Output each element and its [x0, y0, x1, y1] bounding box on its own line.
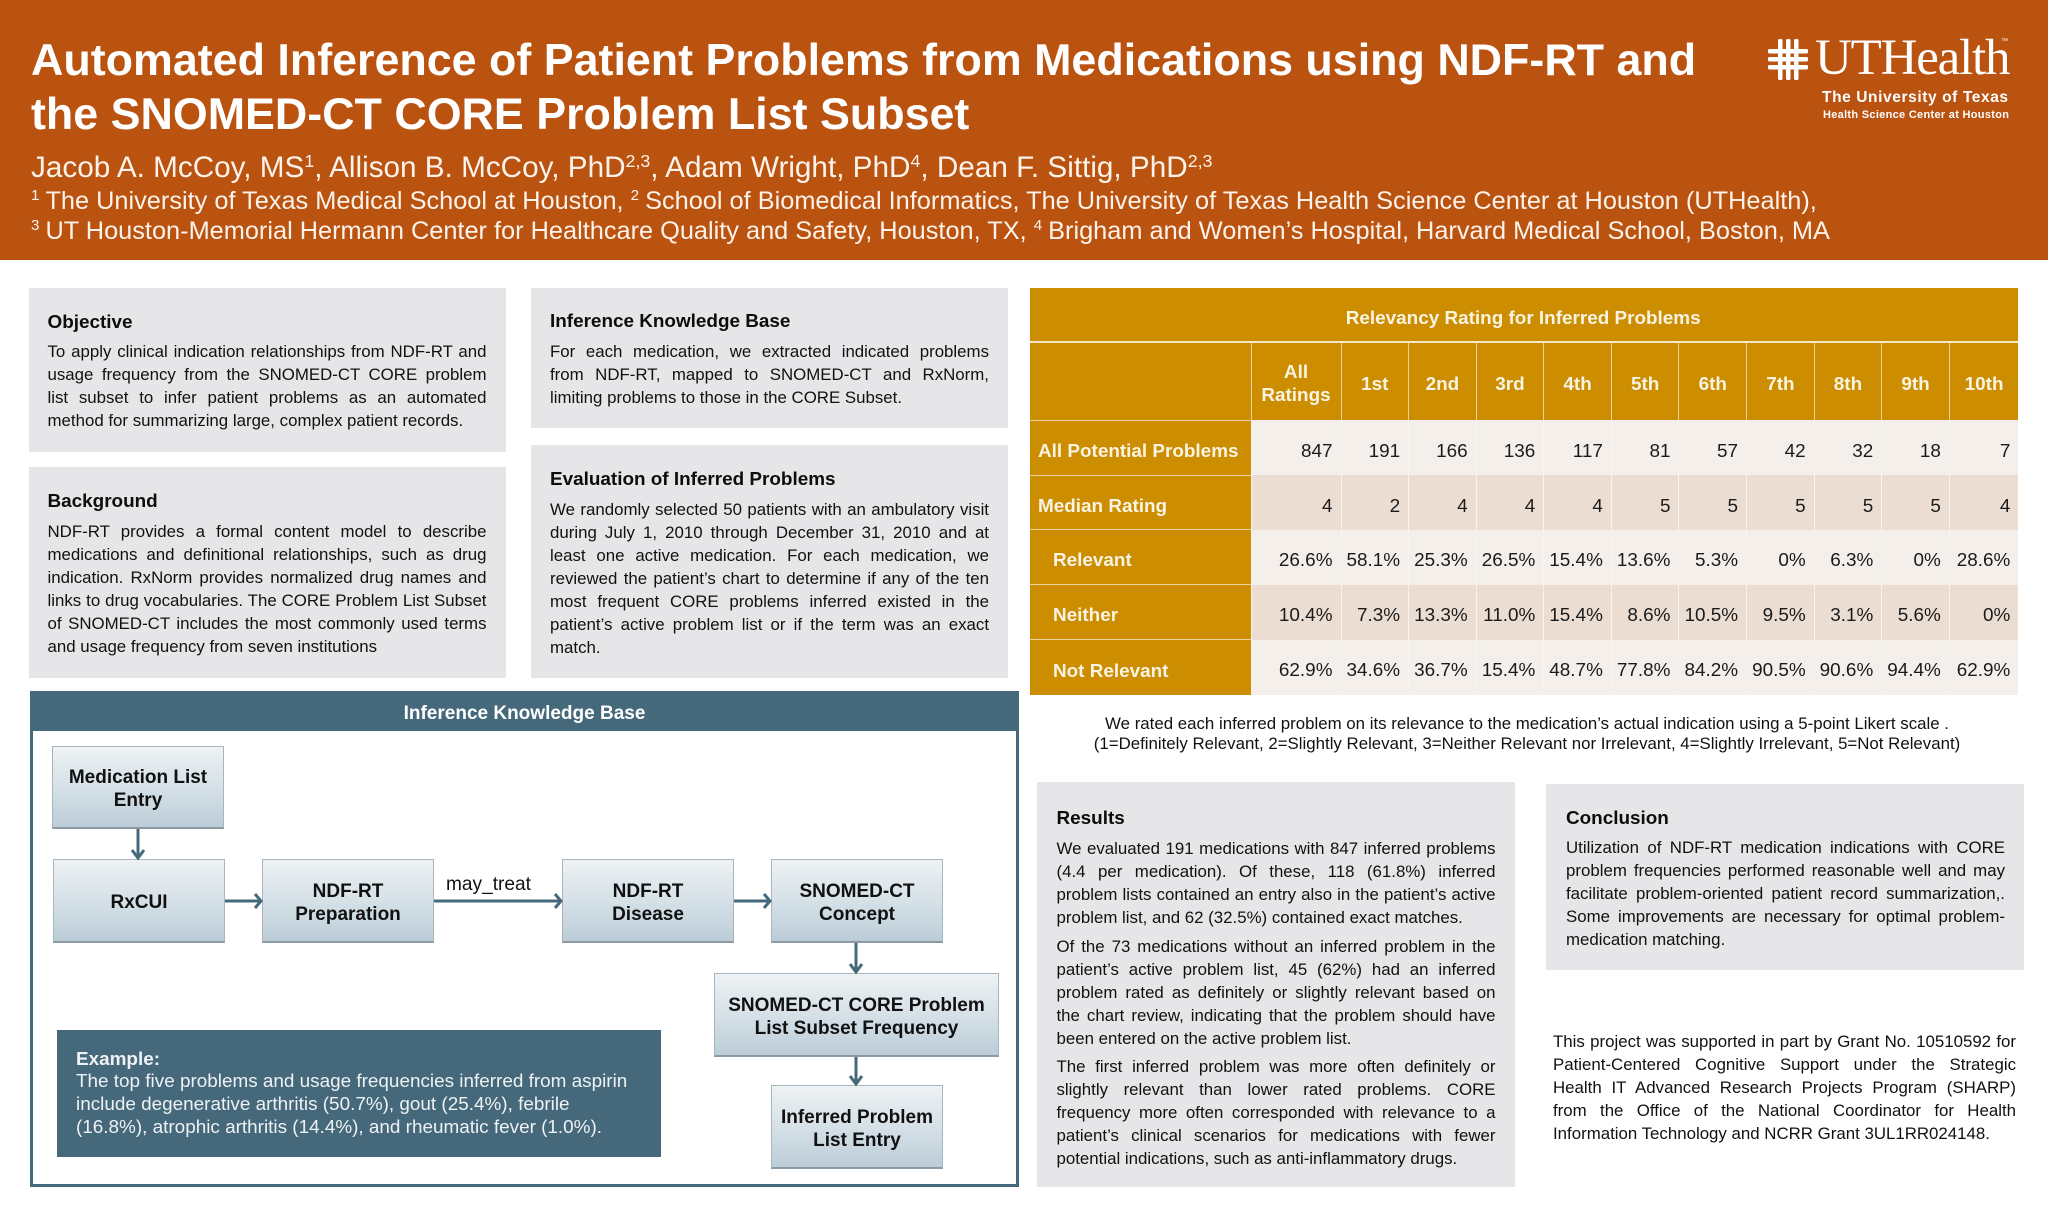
box: SNOMED-CT CORE frequency: SNOMED-CT CORE Problem	[728, 994, 985, 1016]
text: grant acknowledgement: Information Technology and NCRR Grant 3UL1RR024148.	[1553, 1124, 1990, 1142]
table: relevancy rating for inferred problems: 13.6%	[1617, 550, 1670, 571]
table: relevancy rating for inferred problems: 7	[2000, 441, 2010, 462]
text: conclusion: Some improvements are necessary for optimal problem-	[1566, 907, 2005, 926]
table: relevancy rating for inferred problems: 15.4%	[1549, 605, 1603, 626]
table: relevancy rating for inferred problems: 166	[1436, 441, 1468, 462]
table: relevancy rating for inferred problems: 4	[1322, 496, 1332, 517]
table: relevancy rating for inferred problems: Relevancy Rating for Inferred Problems	[1346, 308, 1701, 328]
text: evaluation: reviewed the patient’s chart to determine if any of the ten	[550, 568, 989, 588]
affiliations: 1The University of Texas Medical School at Houston, 2School of Biomedical Informatics, The University of Texas Health Science Center at Houston (UTHealth),	[31, 186, 1817, 214]
table: relevancy rating for inferred problems: 9th	[1901, 374, 1930, 394]
table: relevancy rating for inferred problems: 5.6%	[1898, 605, 1941, 626]
table: relevancy rating for inferred problems: 5	[1728, 496, 1738, 517]
text: inference knowledge base: limiting problems to those in the CORE Subset.	[550, 388, 902, 406]
table: relevancy rating for inferred problems: 26.5%	[1482, 550, 1535, 571]
table: relevancy rating for inferred problems: 0%	[1983, 605, 2010, 626]
example text: (16.8%), atrophic arthritis (14.4%), and rheumatic fever (1.0%).	[76, 1117, 602, 1138]
table: relevancy rating for inferred problems: 4th	[1563, 374, 1592, 394]
box: NDF-RT disease: NDF-RT	[613, 880, 683, 902]
text: background: medications and definitional relationships, such as drug	[48, 545, 486, 564]
arrow: frequency to inferred entry	[850, 1057, 862, 1084]
table: relevancy rating for inferred problems: 15.4%	[1482, 660, 1535, 681]
box: SNOMED-CT CORE frequency	[714, 973, 999, 1057]
text: conclusion: Utilization of NDF-RT medication indications with CORE	[1566, 838, 2005, 857]
table: relevancy rating for inferred problems: All Potential Problems	[1038, 441, 1238, 462]
table: relevancy rating for inferred problems: 0%	[1914, 550, 1941, 571]
text: results: patient’s clinical scenarios for medications with fewer	[1056, 1126, 1496, 1145]
arrows	[130, 829, 864, 1086]
table: relevancy rating for inferred problems: 84.2%	[1684, 660, 1738, 681]
table: relevancy rating for inferred problems: 13.3%	[1414, 605, 1468, 626]
table: relevancy rating for inferred problems: 15.4%	[1549, 550, 1603, 571]
table: relevancy rating for inferred problems: 26.6%	[1279, 550, 1332, 571]
text: results: We evaluated 191 medications with 847 inferred problems	[1056, 839, 1496, 858]
text: results: problem rated as definitely or slightly relevant based on	[1056, 983, 1496, 1002]
text: results: slightly relevant than lower rated problems. CORE	[1056, 1080, 1496, 1099]
text: background: NDF-RT provides a formal content model to describe	[48, 522, 486, 541]
text: inference knowledge base: For each medication, we extracted indicated problems	[550, 342, 989, 360]
table: relevancy rating for inferred problems: 90.6%	[1820, 660, 1873, 681]
arrow: disease to concept	[734, 894, 770, 908]
arrow: preparation to disease	[434, 894, 561, 908]
diagram header	[33, 694, 1016, 731]
table: relevancy rating for inferred problems: 8th	[1834, 374, 1862, 394]
table: relevancy rating for inferred problems: 0%	[1778, 550, 1806, 571]
table: relevancy rating for inferred problems: 10th	[1965, 374, 2004, 394]
box: NDF-RT preparation: Preparation	[295, 904, 401, 924]
table: relevancy rating for inferred problems: Neither	[1053, 605, 1118, 626]
panel: evaluation of inferred problems	[531, 445, 1008, 678]
panel: objective	[29, 288, 506, 452]
text: grant acknowledgement: Patient-Centered Cognitive Support under the Strategic	[1553, 1054, 2016, 1074]
box: inferred problem list entry: Inferred Problem	[781, 1106, 933, 1128]
box: inferred problem list entry: List Entry	[813, 1130, 901, 1150]
authors: Jacob A. McCoy, MS1, Allison B. McCoy, PhD2,3, Adam Wright, PhD4, Dean F. Sittig, PhD2,3	[31, 150, 1212, 184]
table: relevancy rating for inferred problems: 11.0%	[1483, 605, 1535, 626]
text: background: and usage frequency from seven institutions	[48, 637, 377, 656]
table: relevancy rating for inferred problems: 8.6%	[1627, 605, 1670, 626]
table: relevancy rating for inferred problems: 34.6%	[1347, 660, 1400, 681]
table: relevancy rating for inferred problems: 2	[1390, 496, 1400, 517]
arrow: concept to frequency	[850, 943, 862, 972]
table: relevancy rating for inferred problems: 18	[1920, 441, 1941, 462]
box: medication list entry	[52, 746, 224, 829]
example text: Example:	[76, 1048, 160, 1070]
table: relevancy rating for inferred problems: Ratings	[1261, 385, 1331, 406]
table: relevancy rating for inferred problems: 4	[1525, 496, 1535, 517]
box: SNOMED-CT concept: Concept	[819, 904, 895, 924]
logo wordmark: UTHealth	[1815, 30, 2009, 86]
text: inference knowledge base	[550, 342, 989, 406]
table: relevancy rating for inferred problems: 62.9%	[1279, 660, 1332, 681]
header banner	[0, 0, 2048, 260]
text: evaluation: most frequent CORE problems inferred existed in the	[550, 592, 989, 610]
label: may_treat: may_treat	[446, 874, 531, 895]
icon: woven logo mark	[1768, 39, 1808, 80]
heading: evaluation: Evaluation of Inferred Problems	[550, 468, 836, 490]
box: medication list entry: Medication List	[69, 767, 207, 788]
text: results: the chart review, indicating that the problem should have	[1056, 1006, 1496, 1025]
text: background: links to drug vocabularies. The CORE Problem List Subset	[48, 591, 486, 610]
example text: include degenerative arthritis (50.7%), gout (25.4%), febrile	[76, 1094, 570, 1115]
table: relevancy rating for inferred problems: 7th	[1766, 374, 1795, 394]
text: evaluation	[550, 500, 989, 656]
arrow: medication to RxCUI	[132, 829, 144, 858]
table: relevancy rating for inferred problems: 48.7%	[1549, 660, 1603, 681]
table: relevancy rating for inferred problems: 3.1%	[1830, 605, 1873, 626]
table: relevancy rating for inferred problems: 9.5%	[1763, 605, 1806, 626]
logo university line: The University of Texas	[1822, 89, 2009, 106]
table: relevancy rating for inferred problems: 10.4%	[1279, 605, 1332, 626]
table: relevancy rating for inferred problems: 6.3%	[1830, 550, 1873, 571]
table: relevancy rating for inferred problems: 62.9%	[1957, 660, 2010, 681]
table: relevancy rating for inferred problems: 4	[1592, 496, 1603, 517]
table: relevancy rating for inferred problems: 10.5%	[1684, 605, 1738, 626]
text: evaluation: least one active medication. For each medication, we	[550, 546, 989, 564]
table: relevancy rating for inferred problems: 6th	[1699, 374, 1727, 394]
table: relevancy rating for inferred problems: 847	[1301, 441, 1332, 462]
table caption: Likert scale	[1094, 714, 1960, 753]
text: conclusion: facilitate problem-oriented patient record summarization,.	[1566, 884, 2005, 903]
text: objective: method for summarizing large, complex patient records.	[48, 411, 463, 430]
box: SNOMED-CT concept	[771, 859, 943, 943]
text: results: patient’s active problem list, 45 (62%) had an inferred	[1056, 960, 1496, 979]
example text	[76, 1048, 627, 1138]
text: objective: list subset to infer patient problems as an automated	[48, 388, 486, 407]
text: conclusion: problem frequencies performed reasonable well and may	[1566, 861, 2005, 880]
table: relevancy rating for inferred problems: 4	[1457, 496, 1468, 517]
text: evaluation: patient’s active problem list or if the term was an exact	[550, 614, 989, 634]
table: relevancy rating for inferred problems: 42	[1785, 441, 1806, 462]
table: relevancy rating for inferred problems: 5	[1660, 496, 1670, 517]
box: RxCUI: RxCUI	[110, 892, 168, 913]
logo: UTHealth	[1768, 30, 2010, 120]
title: Automated Inference of Patient Problems from Medications using NDF-RT and	[31, 35, 1696, 85]
table: relevancy rating for inferred problems: Relevant	[1053, 550, 1132, 571]
text: inference knowledge base: from NDF-RT, mapped to SNOMED-CT and RxNorm,	[550, 364, 989, 384]
panel: inference knowledge base diagram	[30, 691, 1019, 1187]
table: relevancy rating for inferred problems: 4	[2000, 496, 2010, 517]
heading: background: Background	[48, 491, 158, 512]
table: relevancy rating for inferred problems: All	[1284, 362, 1308, 383]
table: relevancy rating for inferred problems: 5	[1863, 496, 1873, 517]
text: grant acknowledgement	[1553, 1032, 2016, 1142]
box: NDF-RT disease: Disease	[612, 904, 684, 924]
text: grant acknowledgement: from the Office of the National Coordinator for Health	[1553, 1100, 2016, 1120]
heading: objective: Objective	[48, 312, 133, 333]
text: objective: To apply clinical indication relationships from NDF-RT and	[48, 342, 486, 361]
text: results: problem lists contained an entry also in the patient’s active	[1056, 885, 1496, 904]
arrow: RxCUI to preparation	[225, 894, 261, 908]
table: relevancy rating for inferred problems: 1st	[1361, 374, 1388, 394]
text: evaluation: We randomly selected 50 patients with an ambulatory visit	[550, 500, 989, 518]
box: SNOMED-CT CORE frequency: List Subset Frequency	[755, 1018, 958, 1038]
box: NDF-RT preparation: NDF-RT	[313, 880, 383, 902]
panel: inference knowledge base text	[531, 288, 1008, 428]
text: results: frequency more often corresponded with relevance to a	[1056, 1103, 1496, 1122]
text: conclusion: medication matching.	[1566, 930, 1725, 949]
box: medication list entry: Entry	[114, 790, 162, 811]
table: relevancy rating for inferred problems: 77.8%	[1617, 660, 1670, 681]
table: relevancy rating for inferred problems: Median Rating	[1038, 496, 1167, 517]
text: results: problem list, and 62 (32.5%) contained exact matches.	[1056, 908, 1463, 927]
text: grant acknowledgement: Health IT Advanced Research Projects Program (SHARP)	[1553, 1078, 2016, 1096]
text: results: (4.4 per medication). Of these, 118 (61.8%) inferred	[1056, 862, 1496, 881]
table: relevancy rating for inferred problems: 36.7%	[1414, 660, 1468, 681]
logo center line: Health Science Center at Houston	[1823, 108, 2009, 120]
table: relevancy rating for inferred problems: 117	[1573, 441, 1603, 462]
table: relevancy rating for inferred problems: 81	[1649, 441, 1670, 462]
heading: inference knowledge base: Inference Knowledge Base	[550, 310, 790, 332]
box: inferred problem list entry	[771, 1085, 943, 1169]
title: the SNOMED-CT CORE Problem List Subset	[31, 88, 969, 138]
text: background: of SNOMED-CT includes the most commonly used terms	[48, 614, 486, 633]
text: conclusion	[1566, 838, 2005, 949]
affiliations	[31, 186, 1830, 244]
table: relevancy rating for inferred problems: 5th	[1631, 374, 1659, 394]
box: NDF-RT disease	[562, 859, 734, 943]
table: relevancy rating for inferred problems: 136	[1504, 441, 1535, 462]
text: evaluation: during July 1, 2010 through December 31, 2010 and at	[550, 522, 989, 542]
affiliations: 3UT Houston-Memorial Hermann Center for Healthcare Quality and Safety, Houston, TX, 4Brigham and Women’s Hospital, Harvard Medical School, Boston, MA	[31, 216, 1830, 244]
table: relevancy rating for inferred problems: 28.6%	[1957, 550, 2010, 571]
table: relevancy rating for inferred problems: 5	[1795, 496, 1806, 517]
text: results: potential indications, such as anti-inflammatory drugs.	[1056, 1149, 1457, 1168]
text: results: been entered on the active problem list.	[1056, 1029, 1351, 1048]
table: relevancy rating for inferred problems: 191	[1369, 441, 1400, 462]
text: results	[1056, 839, 1496, 1168]
table: relevancy rating for inferred problems: 25.3%	[1414, 550, 1468, 571]
table: relevancy rating for inferred problems: 94.4%	[1887, 660, 1941, 681]
text: objective	[48, 342, 486, 430]
callout: example	[57, 1030, 661, 1157]
table: relevancy rating for inferred problems: 90.5%	[1752, 660, 1806, 681]
panel: background	[29, 467, 506, 678]
box: NDF-RT preparation	[262, 859, 434, 943]
text: evaluation: match.	[550, 638, 601, 656]
table caption: Likert scale: (1=Definitely Relevant, 2=Slightly Relevant, 3=Neither Relevant nor Irrelevant, 4=Slightly Irrelevant, 5=Not Relevant)	[1094, 734, 1960, 753]
logo trademark: ™	[2001, 38, 2008, 45]
table: relevancy rating for inferred problems: 3rd	[1495, 374, 1525, 394]
panel: results	[1037, 782, 1515, 1187]
heading: results: Results	[1056, 808, 1125, 828]
example text: The top five problems and usage frequencies inferred from aspirin	[76, 1071, 627, 1092]
text: results: Of the 73 medications without an inferred problem in the	[1056, 937, 1496, 956]
table: relevancy rating for inferred problems: 32	[1852, 441, 1873, 462]
diagram header: Inference Knowledge Base	[404, 703, 645, 724]
table: relevancy rating for inferred problems: 2nd	[1426, 374, 1459, 394]
text: grant acknowledgement: This project was supported in part by Grant No. 10510592 for	[1553, 1032, 2016, 1050]
text: results: The first inferred problem was more often definitely or	[1056, 1057, 1496, 1076]
table caption: Likert scale: We rated each inferred problem on its relevance to the medication’s actual indication using a 5-point Likert scale .	[1105, 714, 1949, 732]
panel: conclusion	[1546, 784, 2024, 970]
text: objective: usage frequency from the SNOMED-CT CORE problem	[48, 365, 486, 384]
text: background	[48, 522, 486, 656]
table: relevancy rating for inferred problems: 5.3%	[1695, 550, 1738, 571]
title	[31, 35, 1696, 138]
table: relevancy rating for inferred problems: 57	[1717, 441, 1738, 462]
table: relevancy rating for inferred problems: 7.3%	[1357, 605, 1400, 626]
box: SNOMED-CT concept: SNOMED-CT	[799, 880, 915, 902]
table: relevancy rating for inferred problems	[1030, 288, 2018, 695]
table: relevancy rating for inferred problems: Not Relevant	[1053, 661, 1168, 682]
table: relevancy rating for inferred problems: 58.1%	[1347, 550, 1400, 571]
table: relevancy rating for inferred problems: 5	[1930, 496, 1941, 517]
box: RxCUI	[53, 859, 225, 943]
text: background: indication. RxNorm provides normalized drug names and	[48, 568, 486, 587]
heading: conclusion: Conclusion	[1566, 808, 1669, 828]
